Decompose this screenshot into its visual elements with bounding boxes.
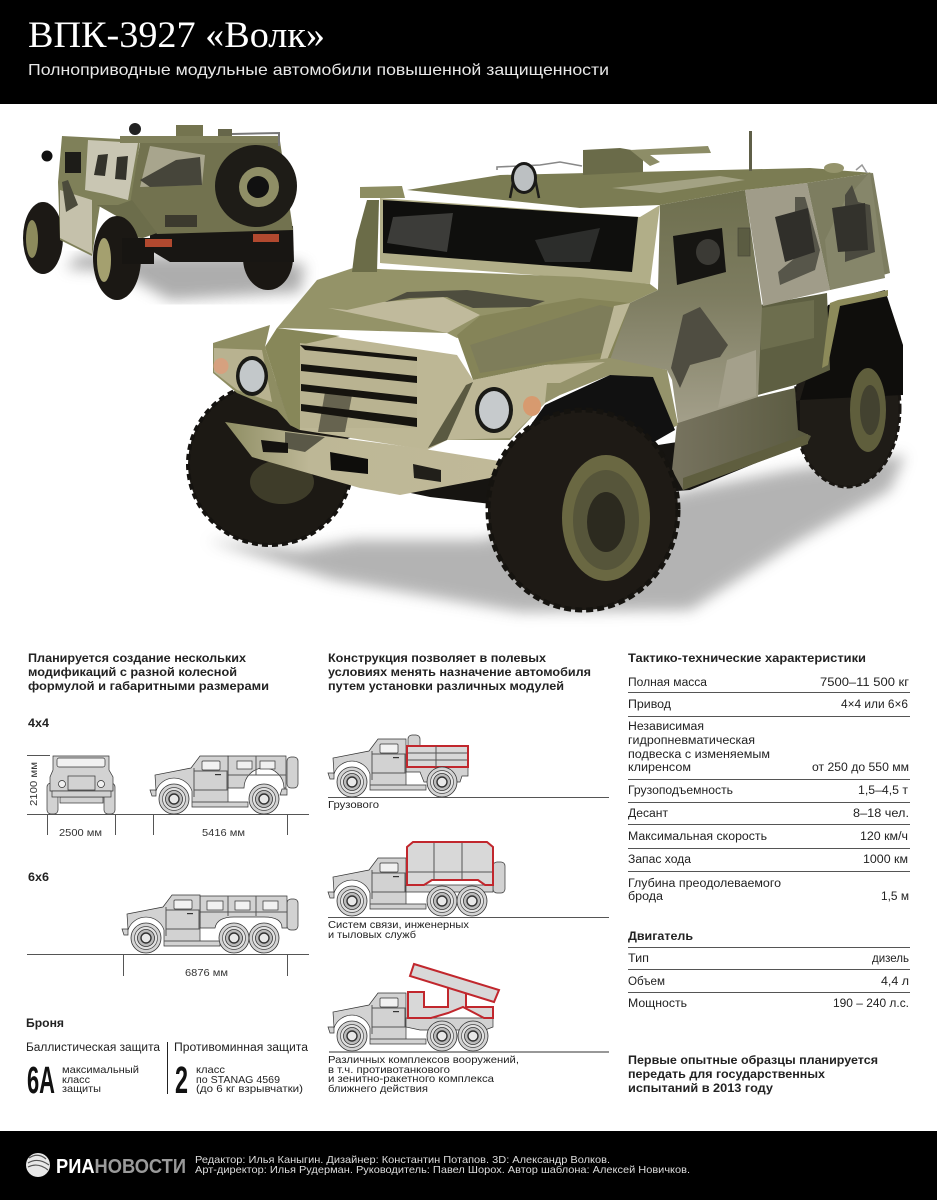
specifications table: Десант [628,808,669,820]
middle column heading: путем установки различных модулей [328,679,564,693]
4x4 dimensions diagram [27,756,309,839]
module: weapons: ближнего действия [328,1083,428,1095]
specifications table: от 250 до 550 мм [812,762,909,774]
engine table: дизель [872,953,909,965]
4x4 dimensions diagram: 2500 мм [59,827,102,839]
rear box panels [745,183,830,306]
left column heading [28,651,269,693]
module: communications [328,842,609,941]
specifications table: Независимая [628,721,704,733]
left column heading: Планируется создание нескольких [28,651,246,665]
engine table: Двигатель [628,929,693,943]
armour protection block [26,1042,309,1102]
specifications table: 1,5 м [881,891,909,903]
specifications table: Полная масса [628,677,708,689]
specifications table: 1,5–4,5 т [858,785,909,797]
side view silhouette [150,756,298,814]
main vehicle illustration [188,131,905,612]
side door [607,190,762,423]
front right wheel [488,410,678,610]
6x6 dimensions diagram [27,895,309,979]
engine table: 4,4 л [881,976,909,988]
credits: Редактор: Илья Каныгин. Дизайнер: Константин Потапов. 3D: Александр Волков. [195,1154,610,1166]
specifications table: Грузоподъемность [628,785,733,797]
icon: RIA globe logo [26,1153,50,1177]
side armour lower and sill [672,388,811,490]
credits: Арт-директор: Илья Рудерман. Руководитель: Павел Шорох. Автор шаблона: Алексей Новичков. [195,1164,690,1176]
module: weapons: в т.ч. противотанкового [328,1064,450,1076]
front view silhouette [47,756,115,814]
ground shadow [207,455,905,612]
4x4 dimensions diagram: 2100 мм [28,762,40,806]
armour heading: Броня [26,1016,64,1030]
engine table: 190 – 240 л.с. [833,998,909,1010]
armour protection block: по STANAG 4569 [196,1074,280,1086]
middle column heading: Конструкция позволяет в полевых [328,651,546,665]
armour protection block: максимальный [62,1064,139,1076]
red launcher tube [410,964,499,1002]
subtitle: Полноприводные модульные автомобили повышенной защищенности [28,62,609,79]
right headlight and indicator [475,387,541,433]
armour protection block: класс [196,1064,225,1076]
specifications table: клиренсом [628,762,691,774]
front bumper [225,422,505,495]
4x4 label: 4x4 [28,716,49,730]
armour protection block: защиты [62,1083,101,1095]
closing note [628,1053,878,1095]
specifications table: Тактико-технические характеристики [628,651,866,665]
front face and left fender [213,325,473,450]
left front wheel [188,383,352,545]
underbody [300,400,800,505]
specifications table: подвеска с изменяемым [628,749,770,761]
closing note: Первые опытные образцы планируется [628,1053,878,1067]
specifications table: брода [628,891,664,903]
red cargo body [407,746,468,767]
specifications table: Глубина преодолеваемого [628,878,781,890]
6x6 label: 6x6 [28,870,49,884]
red launcher mount [408,987,493,1018]
rear-view vehicle illustration [23,123,305,300]
6x6 dimensions diagram: 6876 мм [185,967,228,979]
specifications table: 4×4 или 6×6 [841,699,908,711]
module: weapons: Различных комплексов вооружений, [328,1054,519,1066]
module: weapons: и зенитно-ракетного комплекса [328,1073,494,1085]
armour protection block: класс [62,1074,90,1086]
title: ВПК-3927 «Волк» [28,15,325,56]
engine table: Мощность [628,998,687,1010]
middle column heading [328,651,591,693]
header band [0,0,937,104]
specifications table: Привод [628,699,671,711]
roof turret and antenna [497,131,867,175]
red shelter body [407,842,493,885]
specifications table: 120 км/ч [860,831,908,843]
armour protection block: (до 6 кг взрывчатки) [196,1083,303,1095]
specifications table: 8–18 чел. [853,808,909,820]
specifications table: 1000 км [863,854,908,866]
4x4 dimensions diagram: 5416 мм [202,827,245,839]
specifications table: Запас хода [628,854,692,866]
hood [277,268,658,380]
module: cargo: Грузового [328,799,379,811]
specifications table: гидропневматическая [628,735,755,747]
rear wheel [794,290,903,487]
specifications table: 7500–11 500 кг [820,677,909,689]
module: communications: Систем связи, инженерных [328,919,470,931]
roof [407,168,873,208]
closing note: передать для государственных [628,1067,825,1081]
armour protection block: 6A [27,1060,55,1102]
left column heading: формулой и габаритными размерами [28,679,269,693]
left column heading: модификаций с разной колесной [28,665,237,679]
specifications table: Максимальная скорость [628,831,767,843]
logo wordmark: РИАНОВОСТИ [56,1156,186,1178]
middle column heading: условиях менять назначение автомобиля [328,665,591,679]
credits [195,1154,690,1176]
specifications table [628,651,910,903]
armour protection block: Баллистическая защита [26,1042,161,1054]
armour protection block: 2 [175,1060,188,1102]
armour protection block: Противоминная защита [174,1042,309,1054]
module: weapons [328,964,609,1095]
footer band [0,1131,937,1200]
right fender [447,358,678,450]
roof spotlight [510,162,539,198]
left headlight and indicator [214,356,268,396]
module: communications: и тыловых служб [328,929,416,941]
engine table [628,929,910,1010]
windshield [380,198,660,284]
engine table: Объем [628,976,665,988]
closing note: испытаний в 2013 году [628,1081,773,1095]
snorkel [352,186,405,272]
engine table: Тип [628,953,649,965]
module: cargo [328,735,609,811]
